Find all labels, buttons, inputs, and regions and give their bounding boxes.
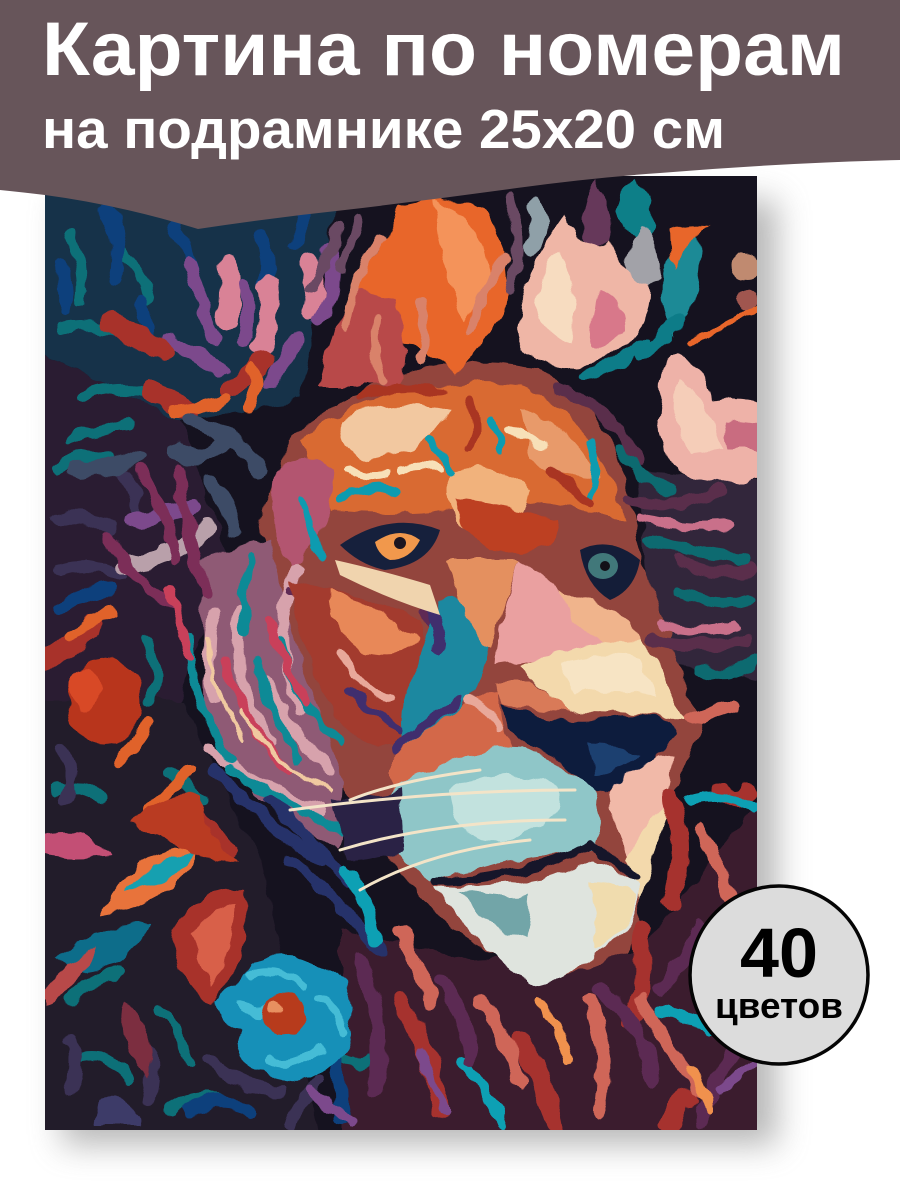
chin xyxy=(435,860,638,986)
badge: 40 colours: цветов xyxy=(715,985,843,1026)
background foliage tones xyxy=(35,180,767,1140)
left leaves: teal and blue xyxy=(55,235,370,1110)
lower mane xyxy=(400,790,750,1125)
header banner xyxy=(0,0,900,229)
left mane strands xyxy=(208,570,330,810)
canvas shadow xyxy=(62,200,777,1145)
badge: 40 colours xyxy=(690,886,868,1064)
red flower xyxy=(68,658,142,746)
mouth xyxy=(435,845,635,880)
lower left leaves xyxy=(45,794,247,1125)
orange mane flames xyxy=(320,199,508,385)
whiskers xyxy=(290,770,575,890)
pink flower right xyxy=(658,355,767,481)
painting: lion portrait xyxy=(35,176,767,1140)
subtitle: на подрамнике 25х20 см xyxy=(42,98,725,160)
lion head base xyxy=(260,363,700,985)
muzzle xyxy=(495,640,685,722)
left leaves: pink and purple petals xyxy=(228,265,315,345)
badge: 40 colours: 40 xyxy=(740,914,818,992)
nose xyxy=(503,705,680,793)
pink flower top xyxy=(518,215,651,366)
upper lip and whisker pad xyxy=(330,748,672,900)
forehead colours xyxy=(272,382,625,570)
right side of mane xyxy=(560,390,750,645)
top right teal leaves xyxy=(584,178,759,335)
title: Картина по номерам xyxy=(42,7,845,92)
left eye xyxy=(335,523,440,615)
left mane base xyxy=(200,540,345,850)
blue flower xyxy=(215,955,352,1081)
cheek and bridge xyxy=(290,560,655,790)
right eye xyxy=(580,544,640,600)
